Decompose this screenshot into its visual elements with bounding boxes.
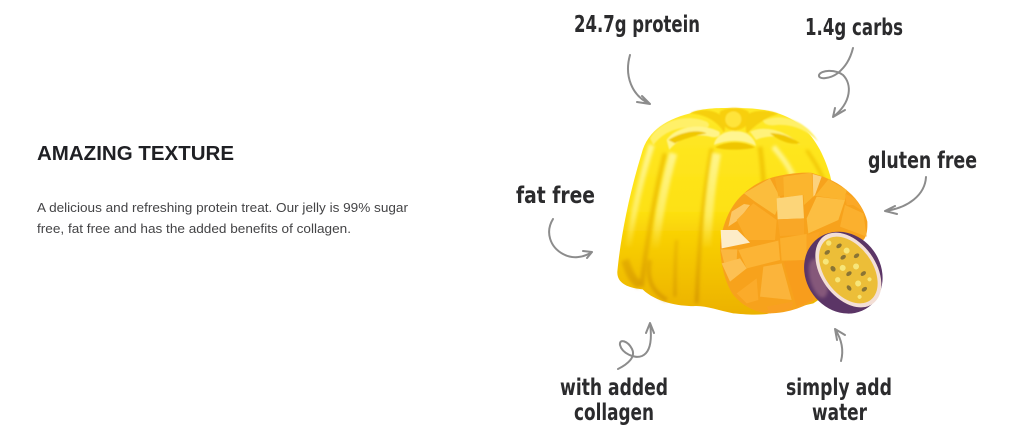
passion fruit rim xyxy=(802,220,895,320)
illustration: passion fruit xyxy=(788,216,899,329)
label: gluten free: gluten free xyxy=(868,148,977,174)
label: simply add water xyxy=(786,375,892,426)
label: fat free: fat free xyxy=(516,183,595,209)
illustration: yellow jelly xyxy=(617,108,853,315)
jelly highlights xyxy=(628,145,793,250)
illustration: mango xyxy=(720,173,867,313)
jelly crown lobes xyxy=(650,108,818,150)
passion fruit flesh xyxy=(807,226,890,314)
arrow: water xyxy=(835,329,845,361)
arrow: carbs xyxy=(819,48,853,117)
label: simply add water: simply add xyxy=(786,375,892,401)
passion fruit skin xyxy=(788,216,899,329)
arrow: fat free xyxy=(549,219,592,258)
body text: A delicious and refreshing protein treat. Our jelly is 99% sugar xyxy=(37,200,409,215)
body text: free, fat free and has the added benefits of collagen. xyxy=(37,221,351,236)
label: simply add water: water xyxy=(812,400,867,426)
mango base xyxy=(720,173,867,313)
label: with added collagen xyxy=(560,375,668,426)
jelly flute shading xyxy=(625,147,823,303)
mango cubes xyxy=(721,173,867,313)
label: 24.7g protein: 24.7g protein xyxy=(574,12,700,38)
label: with added collagen: with added xyxy=(560,375,668,401)
jelly body xyxy=(617,108,853,315)
heading: amazing texture: AMAZING TEXTURE xyxy=(37,143,234,165)
arrow: protein xyxy=(628,55,650,104)
passion fruit seeds xyxy=(813,230,881,305)
arrow: collagen xyxy=(618,323,654,369)
body text xyxy=(37,200,409,236)
arrow: gluten free xyxy=(885,177,926,214)
label: with added collagen: collagen xyxy=(574,400,654,426)
label: 1.4g carbs: 1.4g carbs xyxy=(805,15,903,41)
